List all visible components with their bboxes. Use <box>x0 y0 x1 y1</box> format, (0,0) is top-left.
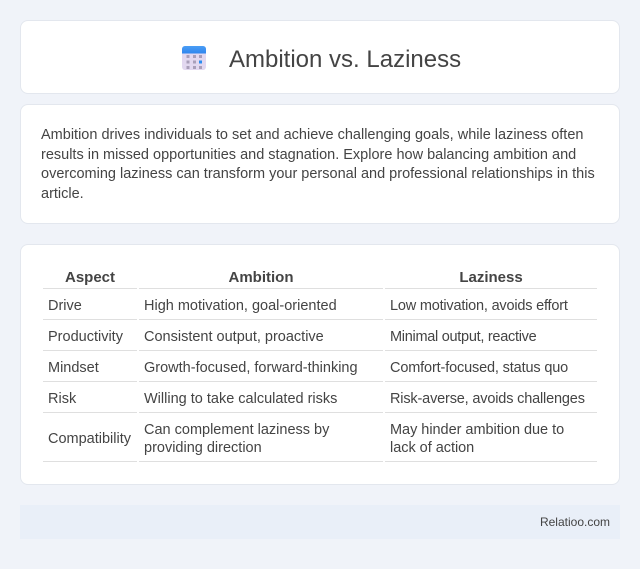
row: drive: Drive <box>48 298 82 314</box>
intro text: Ambition drives individuals to set and achieve challenging goals, while laziness often <box>41 127 583 143</box>
row: productivity: Productivity <box>48 329 123 345</box>
row: compatibility: Compatibility <box>48 431 131 447</box>
intro text: results in missed opportunities and stagnation. Explore how balancing ambition and <box>41 146 576 162</box>
row: mindset: Growth-focused, forward-thinking <box>144 360 358 376</box>
title: Ambition vs. Laziness <box>229 46 461 73</box>
row: risk: Risk <box>48 391 76 407</box>
row: compatibility: Can complement laziness by <box>144 422 329 438</box>
row: drive: Low motivation, avoids effort <box>390 298 568 314</box>
row: risk <box>48 391 585 407</box>
row: compatibility: lack of action <box>390 440 474 456</box>
row: productivity: Minimal output, reactive <box>390 329 536 345</box>
row: mindset: Comfort-focused, status quo <box>390 360 568 376</box>
row: risk: Willing to take calculated risks <box>144 391 337 407</box>
footer text: Relatioo.com <box>540 515 610 529</box>
panel: header card <box>20 20 620 94</box>
table header: Ambition <box>228 269 294 286</box>
row: compatibility <box>48 422 564 456</box>
table header <box>65 269 523 286</box>
icon: calendar <box>182 46 206 70</box>
row: productivity <box>48 329 536 345</box>
footer bar <box>20 505 620 539</box>
row: risk: Risk-averse, avoids challenges <box>390 391 585 407</box>
intro text: article. <box>41 186 84 202</box>
table header: Aspect <box>65 269 115 286</box>
intro text: overcoming laziness can transform your personal and professional relationships in this <box>41 166 595 182</box>
table header: Laziness <box>459 269 523 286</box>
panel: comparison table <box>20 244 620 485</box>
row: drive: High motivation, goal-oriented <box>144 298 337 314</box>
row: mindset <box>48 360 568 376</box>
row: productivity: Consistent output, proactive <box>144 329 324 345</box>
row: compatibility: providing direction <box>144 440 262 456</box>
row: compatibility: May hinder ambition due to <box>390 422 564 438</box>
row: mindset: Mindset <box>48 360 99 376</box>
intro text <box>41 127 595 202</box>
row: drive <box>48 298 568 314</box>
panel: intro card <box>20 104 620 224</box>
